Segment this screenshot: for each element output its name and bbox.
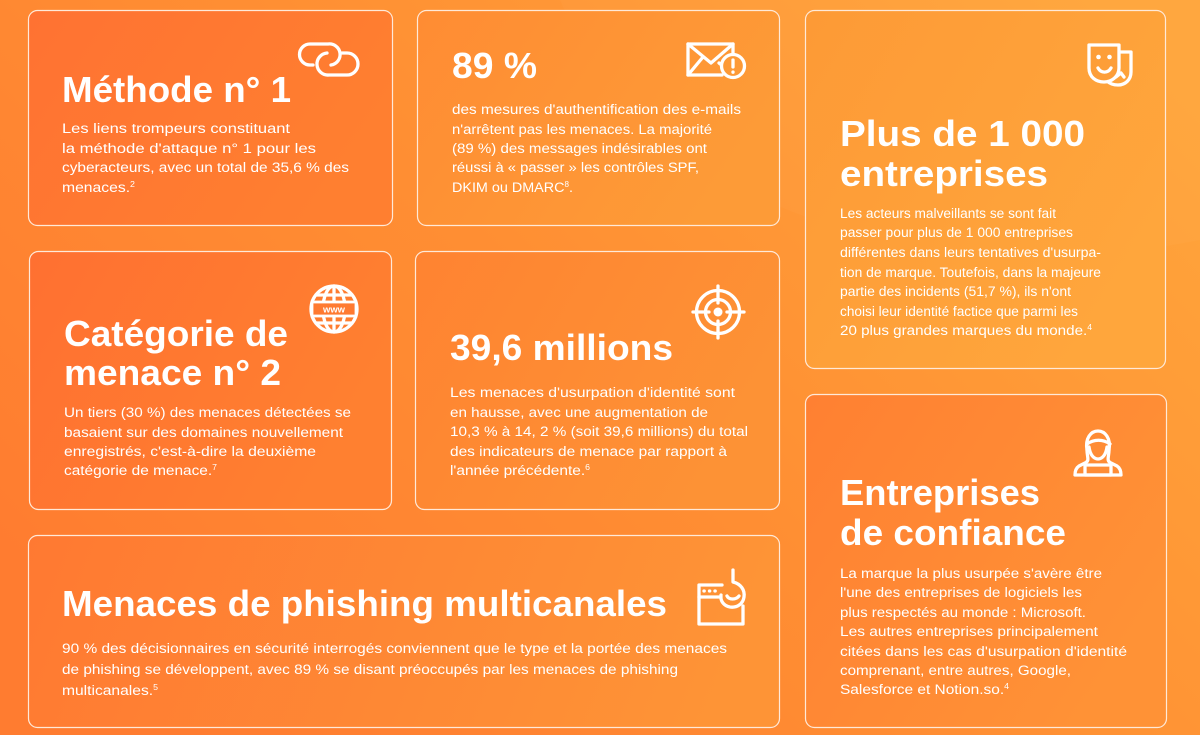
panel: Plus de 1 000 entreprises xyxy=(806,10,1166,368)
text block: l'année précédente. xyxy=(450,463,574,479)
text block: 8 xyxy=(564,180,570,189)
heading: Catégorie de xyxy=(64,313,288,354)
text block xyxy=(840,206,1101,339)
heading: menace n° 2 xyxy=(64,352,281,393)
text block: DKIM ou DMARC xyxy=(452,180,563,196)
text block: Salesforce et Notion.so. xyxy=(840,682,991,698)
text block: n'arrêtent pas les menaces. La majorité xyxy=(452,122,712,138)
text block: 2 xyxy=(130,180,136,189)
heading: Entreprises xyxy=(840,472,1040,513)
text block: en hausse, avec une augmentation de xyxy=(450,405,708,421)
text block: choisi leur identité factice que parmi les xyxy=(840,304,1078,320)
text block: des indicateurs de menace par rapport à xyxy=(450,444,727,460)
text block xyxy=(840,566,1127,698)
panel: Entreprises de confiance xyxy=(806,394,1166,728)
heading: entreprises xyxy=(840,153,1048,194)
icon: www globe: www xyxy=(322,304,346,314)
text block: 90 % des décisionnaires en sécurité interrogés conviennent que le type et la portée des menaces xyxy=(62,641,727,657)
text block: 7 xyxy=(212,463,218,472)
text block: (89 %) des messages indésirables ont xyxy=(452,141,707,157)
text block: catégorie de menace. xyxy=(64,463,200,479)
icon: chain link xyxy=(300,44,358,75)
icon: theatre masks xyxy=(1089,45,1131,85)
text block: partie des incidents (51,7 %), ils n'ont xyxy=(840,284,1071,300)
text block: 6 xyxy=(585,463,591,472)
text block: 5 xyxy=(153,683,159,692)
text block: des mesures d'authentification des e-mails xyxy=(452,102,741,118)
text block: plus respectés au monde : Microsoft. xyxy=(840,605,1086,621)
panel: Menaces de phishing multicanales xyxy=(28,536,780,728)
text block: Les acteurs malveillants se sont fait xyxy=(840,206,1056,222)
text block: La marque la plus usurpée s'avère être xyxy=(840,566,1102,582)
text block: enregistrés, c'est-à-dire la deuxième xyxy=(64,444,316,460)
text block: Les autres entreprises principalement xyxy=(840,624,1098,640)
heading: Menaces de phishing multicanales xyxy=(62,583,667,624)
icon: www globe xyxy=(311,286,357,332)
text block xyxy=(62,641,727,699)
text block: passer pour plus de 1 000 entreprises xyxy=(840,225,1073,241)
text block: Les liens trompeurs constituant xyxy=(62,121,290,137)
panel: Catégorie de menace n° 2 xyxy=(30,252,392,510)
text block: 20 plus grandes marques du monde. xyxy=(840,323,1071,339)
text block xyxy=(64,405,351,479)
heading: Plus de 1 000 xyxy=(840,113,1085,154)
icon: browser with phishing hook xyxy=(699,570,744,624)
text block: menaces. xyxy=(62,180,124,196)
text block: Les menaces d'usurpation d'identité sont xyxy=(450,385,735,401)
heading: de confiance xyxy=(840,512,1066,553)
icon: target xyxy=(693,286,744,338)
panel: 89 % xyxy=(418,10,780,226)
icon: envelope with alert xyxy=(688,44,744,78)
heading xyxy=(64,313,288,393)
text block: tion de marque. Toutefois, dans la majeure xyxy=(840,265,1101,281)
panel: Méthode n° 1 xyxy=(28,10,392,226)
panel: 39,6 millions xyxy=(416,252,780,510)
text block: de phishing se développent, avec 89 % se disant préoccupés par les menaces de phishing xyxy=(62,662,678,678)
icon: hacker xyxy=(1075,431,1121,475)
text block: multicanales. xyxy=(62,683,145,699)
heading xyxy=(840,113,1085,194)
text block: 4 xyxy=(1004,682,1010,691)
text block: citées dans les cas d'usurpation d'identité xyxy=(840,644,1127,660)
text block xyxy=(450,385,748,479)
text block xyxy=(452,102,741,196)
text block: basaient sur des domaines nouvellement xyxy=(64,425,343,441)
text block: l'une des entreprises de logiciels les xyxy=(840,585,1082,601)
text block: 10,3 % à 14, 2 % (soit 39,6 millions) du total xyxy=(450,424,748,440)
heading: 89 % xyxy=(452,45,537,86)
heading: Méthode n° 1 xyxy=(62,69,291,110)
heading: 39,6 millions xyxy=(450,327,673,368)
text block xyxy=(62,121,349,196)
text block: 4 xyxy=(1087,323,1093,332)
text block: comprenant, entre autres, Google, xyxy=(840,663,1071,679)
text block: la méthode d'attaque n° 1 pour les xyxy=(62,141,316,157)
text block: différentes dans leurs tentatives d'usurpa- xyxy=(840,245,1101,261)
heading xyxy=(840,472,1066,553)
text block: cyberacteurs, avec un total de 35,6 % des xyxy=(62,160,349,176)
text block: réussi à « passer » les contrôles SPF, xyxy=(452,160,699,176)
text block: . xyxy=(569,180,573,196)
text block: Un tiers (30 %) des menaces détectées se xyxy=(64,405,351,421)
